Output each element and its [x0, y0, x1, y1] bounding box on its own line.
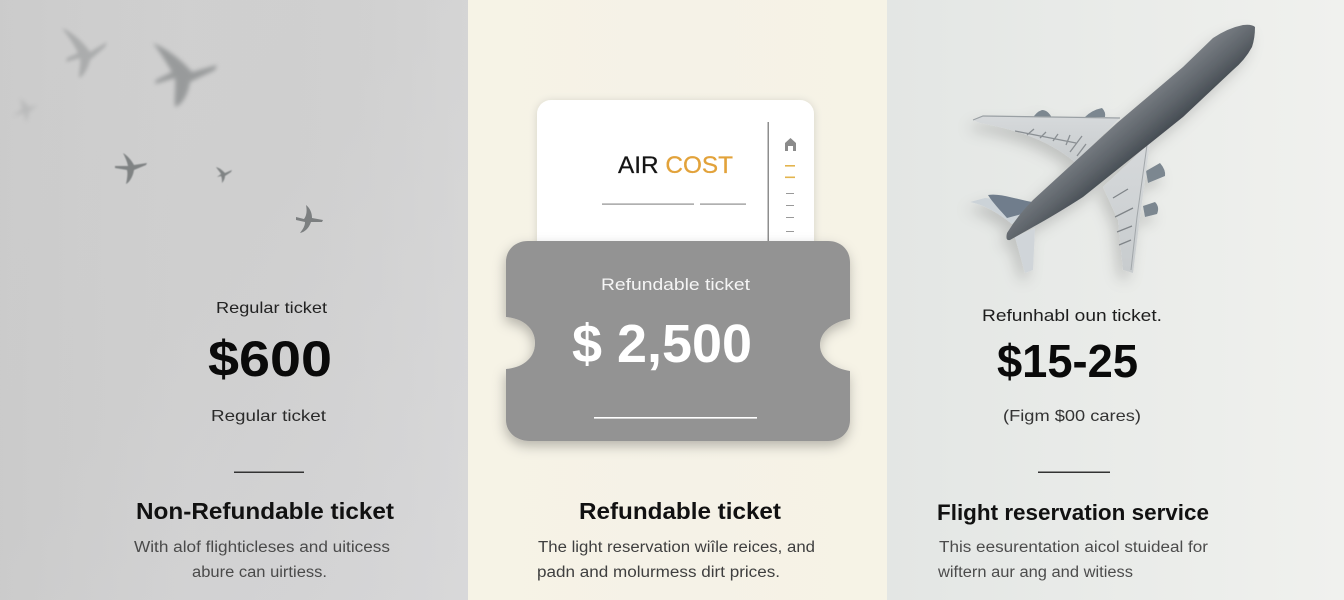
- heading: non-refundable ticket: Non-Refundable ticket: [136, 498, 394, 524]
- tail fins: [970, 198, 1030, 224]
- description: wiftern aur ang and witiess: [937, 564, 1133, 581]
- label: regular ticket: Regular ticket: [216, 300, 328, 317]
- description: [937, 539, 1208, 581]
- sublabel: regular ticket: Regular ticket: [211, 408, 327, 425]
- price: $15-25: $15-25: [997, 335, 1138, 387]
- ticket label: Refundable ticket: [601, 275, 750, 294]
- heading: flight reservation service: Flight reservation service: [937, 500, 1209, 525]
- engines: [1033, 110, 1052, 118]
- icon: airplane: [970, 25, 1255, 273]
- icon: ticket stub marks: [785, 138, 796, 232]
- divider: [234, 472, 304, 473]
- description: [134, 539, 390, 581]
- gray ticket: [506, 241, 850, 441]
- air cost title: AIR COST: [618, 152, 733, 179]
- white ticket: air cost: [537, 100, 814, 270]
- sublabel: (Figm $00 cares): [1003, 408, 1141, 425]
- description: abure can uirtiess.: [192, 564, 327, 581]
- description: [537, 539, 815, 581]
- fuselage: [1006, 25, 1255, 240]
- panel: non-refundable ticket: [0, 0, 468, 600]
- wings: [973, 116, 1120, 162]
- icon: flock of planes: [13, 28, 323, 233]
- heading: refundable ticket: Refundable ticket: [579, 498, 781, 524]
- description: The light reservation wiîle reices, and: [538, 539, 815, 556]
- price: $2,500: $ 2,500: [572, 314, 752, 374]
- price: $600: $600: [208, 331, 332, 387]
- divider: [1038, 472, 1110, 473]
- description: With alof flighticleses and uiticess: [134, 539, 390, 556]
- description: padn and molurmess dirt prices.: [537, 564, 780, 581]
- panel: refundable ticket: [468, 0, 887, 600]
- description: This eesurentation aicol stuideal for: [939, 539, 1208, 556]
- label: refundable ticket: Refunhabl oun ticket.: [982, 307, 1162, 325]
- panel: flight reservation service: [887, 0, 1344, 600]
